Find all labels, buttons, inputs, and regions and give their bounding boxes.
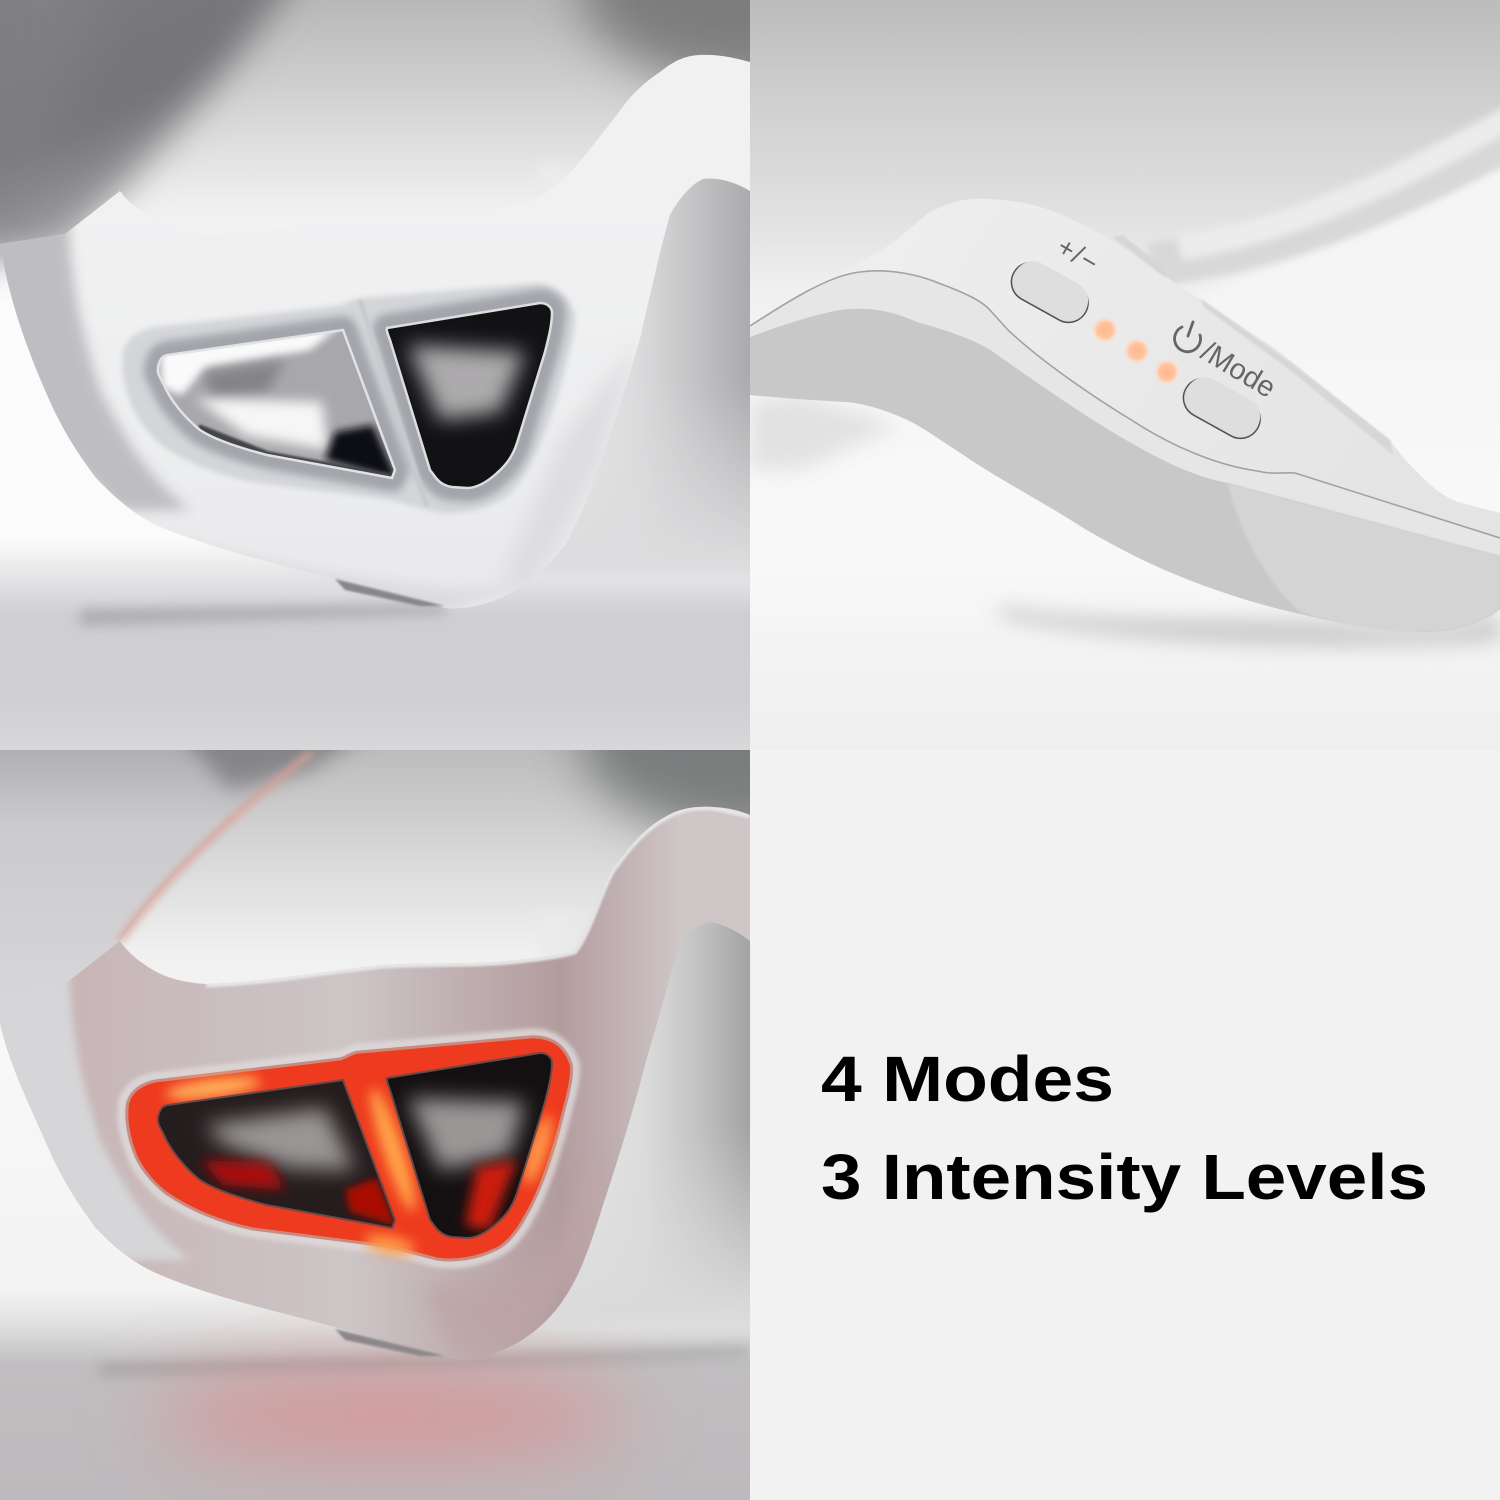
seam line [750, 271, 1500, 538]
table shadow [1000, 606, 1500, 647]
dark blurred strap [0, 0, 330, 260]
left button [150, 1070, 400, 1240]
line: modes: 4 Modes [821, 1043, 1114, 1115]
orange hot spots [164, 1072, 558, 1259]
device body [0, 790, 750, 1380]
strap [0, 750, 360, 990]
glow halo [122, 1033, 575, 1264]
label: mode: /Mode [1195, 336, 1281, 405]
white device body [0, 40, 750, 620]
gasket divider [360, 300, 427, 507]
floor contact shadow [80, 604, 445, 626]
controller grey side [750, 309, 1500, 632]
icon: power [1175, 322, 1201, 352]
plus/minus button [1010, 262, 1089, 324]
bright area below cord [1269, 166, 1500, 274]
pale facet [1228, 483, 1500, 632]
panel: device close-up, lights off [0, 0, 750, 750]
left shaded band [0, 200, 190, 510]
controller top face [901, 198, 1500, 537]
background cable blur [750, 395, 900, 470]
upper edge hardware [1112, 235, 1393, 455]
panel: caption background [750, 750, 1500, 1500]
controller lower band [750, 280, 1500, 556]
bottom charging edge [335, 579, 445, 606]
label: plus minus: +/− [1052, 231, 1105, 279]
mode button [1182, 378, 1261, 440]
inner gasket ring [158, 303, 552, 488]
top-right background shadow [558, 0, 750, 92]
left chrome button [156, 328, 396, 480]
arch interior [550, 922, 750, 1320]
cord [1150, 112, 1500, 265]
right dark button [386, 302, 554, 490]
button cluster [122, 283, 575, 514]
left pale band [0, 940, 190, 1260]
arch interior [544, 178, 750, 572]
lower shade [281, 564, 481, 608]
glowing button cluster [122, 1033, 575, 1264]
red floor reflection [150, 1373, 630, 1457]
lower pink shade [420, 1150, 610, 1355]
panel: device close-up, red light on [0, 750, 750, 1500]
bottom charging edge [335, 1329, 445, 1356]
floor contact shadow [100, 1346, 750, 1376]
line: intensity levels: 3 Intensity Levels [821, 1141, 1428, 1213]
right button [380, 1045, 560, 1245]
glowing gasket [127, 1037, 571, 1260]
translucent gasket [122, 283, 575, 514]
LED indicators [1092, 317, 1180, 385]
panel: controller with buttons and LEDs [750, 0, 1500, 654]
text: features heading [821, 1043, 1428, 1213]
top rim highlight [206, 807, 750, 984]
top-right background shadow [556, 750, 750, 844]
